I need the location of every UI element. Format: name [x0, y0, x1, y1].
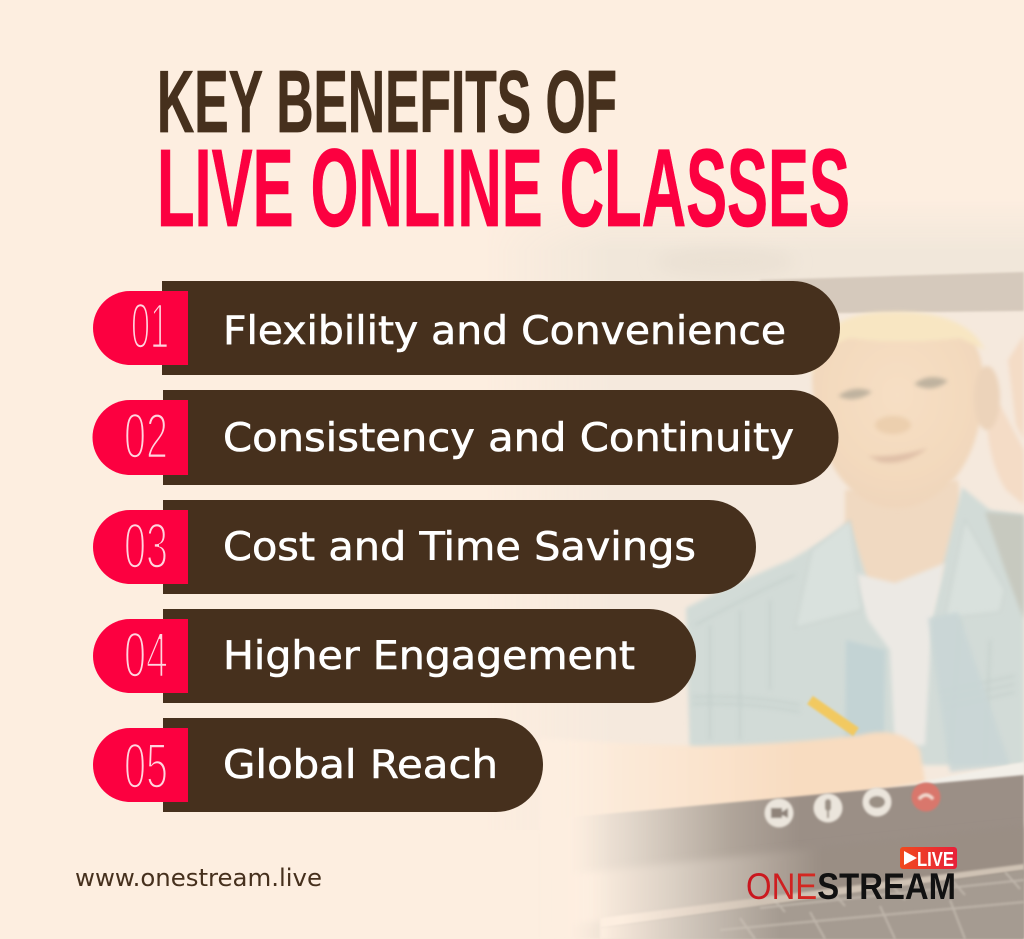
- number: 03: [124, 510, 168, 582]
- number tab: [93, 728, 188, 802]
- icon: microphone button: [814, 794, 842, 822]
- light stripe above keyboard: [600, 864, 1024, 928]
- live badge: [900, 847, 957, 871]
- number: 01: [131, 290, 169, 362]
- soft shadow above screen: [655, 246, 795, 278]
- bar: [163, 390, 838, 485]
- number tab: [93, 510, 188, 584]
- keyboard: [600, 870, 1024, 939]
- number tab: [93, 291, 188, 365]
- jacket details: [988, 680, 990, 682]
- boy: t-shirt: [853, 563, 945, 748]
- title: [157, 52, 850, 250]
- boy: jacket: [686, 487, 1024, 765]
- live badge: LIVE: [917, 849, 954, 871]
- boy: hand waving: [987, 335, 1024, 505]
- boy: arm and hand: [645, 730, 926, 808]
- title line 1: KEY BENEFITS OF: [157, 52, 617, 151]
- logo: OneStream Live: [746, 847, 957, 907]
- bar: [163, 609, 696, 703]
- keyboard keys: [720, 872, 1024, 939]
- laptop lower band: [596, 826, 1024, 917]
- jacket collars: [822, 520, 860, 592]
- photo: boy in live online class on laptop screen: [578, 236, 1024, 939]
- number: 02: [124, 400, 168, 472]
- number: 05: [124, 730, 168, 802]
- wordmark: ONESTREAM: [746, 865, 956, 907]
- number: 04: [124, 619, 168, 691]
- benefit 1: [93, 281, 840, 375]
- number tab: [93, 619, 188, 693]
- icon: camera button: [764, 798, 794, 828]
- laptop bottom bezel: [592, 774, 1024, 939]
- laptop top bezel: [760, 272, 1024, 314]
- benefit 2: [92, 390, 838, 485]
- jacket right shoulder shade: [985, 512, 1024, 620]
- bar: [162, 281, 840, 375]
- number tab: [92, 400, 188, 475]
- wall above the screen: [480, 200, 1024, 280]
- boy: neck: [845, 480, 968, 588]
- website url: www.onestream.live: [75, 864, 322, 892]
- bar: [163, 718, 543, 812]
- label: Global Reach: [223, 743, 498, 788]
- wall behind boy: [962, 484, 963, 485]
- jacket placket: [846, 642, 884, 736]
- boy: head: [812, 312, 1000, 508]
- bar: [163, 500, 756, 594]
- label: Flexibility and Convenience: [223, 309, 786, 354]
- icon: end call button: [912, 782, 940, 812]
- benefit 5: [93, 718, 543, 812]
- pencil: [810, 700, 856, 732]
- call controls: [764, 782, 940, 828]
- benefit 3: [93, 500, 756, 594]
- label: Consistency and Continuity: [223, 416, 794, 461]
- label: Higher Engagement: [223, 634, 635, 679]
- label: Cost and Time Savings: [223, 525, 696, 570]
- benefit 4: [93, 609, 696, 703]
- paper: [920, 762, 1024, 784]
- boy: facial features: [838, 377, 948, 463]
- icon: chat button: [862, 788, 892, 816]
